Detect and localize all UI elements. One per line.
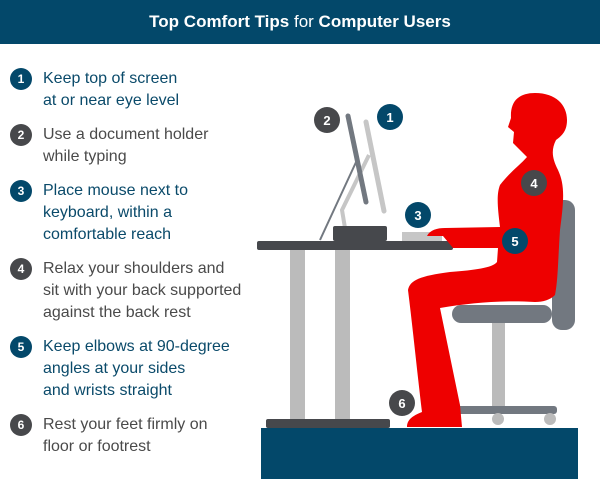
title (0, 0, 600, 44)
badge 4 (521, 170, 547, 196)
badge 6: 6 (398, 396, 406, 411)
tip 4: Relax your shoulders and (43, 260, 224, 277)
tip 6: Rest your feet firmly on (43, 416, 208, 433)
chair (452, 200, 575, 425)
tip 2: 2 (18, 128, 24, 142)
tip 5: and wrists straight (43, 382, 172, 399)
floor (261, 428, 578, 479)
badge 2 (314, 107, 340, 133)
tip 4: 4 (18, 262, 24, 276)
tip 3: Place mouse next to (43, 182, 188, 199)
badge 3 (405, 202, 431, 228)
badge 4: 4 (530, 176, 538, 191)
badge 1 (377, 104, 403, 130)
badge 6 (389, 390, 415, 416)
tip 6 (10, 414, 208, 455)
tip 5 (10, 336, 230, 399)
tip 3 (10, 180, 188, 243)
tip 3: comfortable reach (43, 226, 171, 243)
tip 2: Use a document holder (43, 126, 208, 143)
badge 5: 5 (511, 234, 519, 249)
tip 3: 3 (18, 184, 24, 198)
tip 2: while typing (43, 148, 127, 165)
desk (257, 241, 453, 428)
tip 5: 5 (18, 340, 24, 354)
tip 1: Keep top of screen (43, 70, 177, 87)
tip 4: against the back rest (43, 304, 191, 321)
tip 4: sit with your back supported (43, 282, 241, 299)
tip 5: Keep elbows at 90-degree (43, 338, 230, 355)
tip 5: angles at your sides (43, 360, 185, 377)
tip 1 (10, 68, 179, 109)
tip 3: keyboard, within a (43, 204, 172, 221)
badge 5 (502, 228, 528, 254)
tip 1: 1 (18, 72, 24, 86)
badge 3: 3 (414, 208, 422, 223)
badge 1: 1 (386, 110, 394, 125)
tip 6: 6 (18, 418, 24, 432)
keyboard (402, 232, 442, 241)
title: Top Comfort Tips for Computer Users (149, 12, 451, 31)
tip 2 (10, 124, 208, 165)
tip 6: floor or footrest (43, 438, 151, 455)
monitor (320, 116, 387, 241)
person (407, 93, 567, 427)
tip 1: at or near eye level (43, 92, 179, 109)
badge 2: 2 (323, 113, 331, 128)
tip 4 (10, 258, 241, 321)
